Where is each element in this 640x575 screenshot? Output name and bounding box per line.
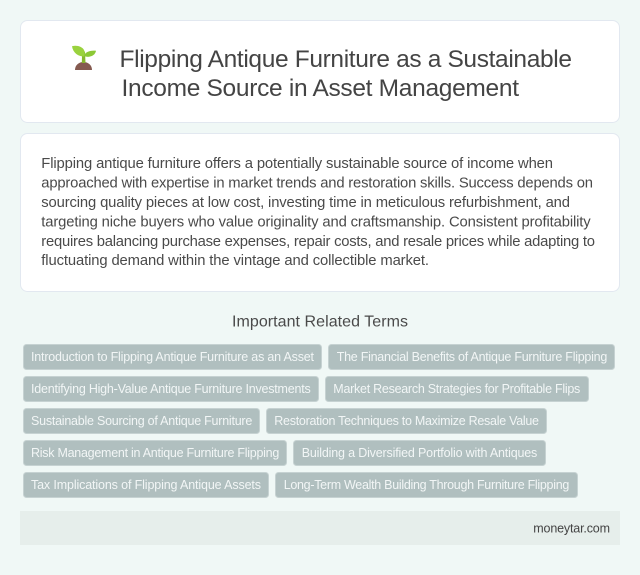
text block: description: sourcing quality pieces at low cost, investing time in meticulous refurbishment, and xyxy=(41,195,570,211)
tag: identifying high-value xyxy=(24,376,318,402)
tag: tax implications xyxy=(24,472,268,498)
text block: description: approached with expertise in market trends and restoration skills. Success depends on xyxy=(41,176,593,192)
tag: tax implications: Tax Implications of Flipping Antique Assets xyxy=(31,478,261,492)
tag: introduction: Introduction to Flipping Antique Furniture as an Asset xyxy=(31,350,315,364)
tag: diversified portfolio xyxy=(294,440,546,466)
tag: financial benefits xyxy=(328,344,614,370)
title xyxy=(120,46,572,102)
text block: description: Flipping antique furniture offers a potentially sustainable source of income when xyxy=(41,156,553,172)
icon: seedling xyxy=(72,46,96,70)
tag: risk management xyxy=(24,440,286,466)
tag: restoration techniques xyxy=(266,408,546,434)
heading: important related terms: Important Related Terms xyxy=(232,314,408,330)
footer xyxy=(20,511,620,545)
tag: market research: Market Research Strategies for Profitable Flips xyxy=(333,382,580,396)
panel: header xyxy=(20,20,620,122)
tag: restoration techniques: Restoration Techniques to Maximize Resale Value xyxy=(274,414,539,428)
tag: identifying high-value: Identifying High-Value Antique Furniture Investments xyxy=(31,382,311,396)
tag: sustainable sourcing xyxy=(24,408,260,434)
tag: introduction xyxy=(24,344,322,370)
tag: sustainable sourcing: Sustainable Sourcing of Antique Furniture xyxy=(31,414,252,428)
panel: related terms xyxy=(24,344,614,498)
title: Flipping Antique Furniture as a Sustainable xyxy=(120,46,572,73)
tag: long-term wealth xyxy=(276,472,578,498)
footer source text: moneytar.com xyxy=(533,521,610,535)
text block: description xyxy=(41,156,595,269)
text block: description: fluctuating demand within the vintage and collectible market. xyxy=(41,253,429,269)
panel: description xyxy=(20,134,620,292)
tag: market research xyxy=(326,376,588,402)
text block: description: requires balancing purchase expenses, repair costs, and resale prices while adapting to xyxy=(41,234,595,250)
title: Income Source in Asset Management xyxy=(122,75,519,102)
tag: diversified portfolio: Building a Diversified Portfolio with Antiques xyxy=(302,446,537,460)
text block: description: targeting niche buyers who value originality and craftsmanship. Consistent profitability xyxy=(41,214,591,230)
tag: financial benefits: The Financial Benefits of Antique Furniture Flipping xyxy=(337,350,607,364)
tag: risk management: Risk Management in Antique Furniture Flipping xyxy=(31,446,279,460)
tag: long-term wealth: Long-Term Wealth Building Through Furniture Flipping xyxy=(284,478,569,492)
